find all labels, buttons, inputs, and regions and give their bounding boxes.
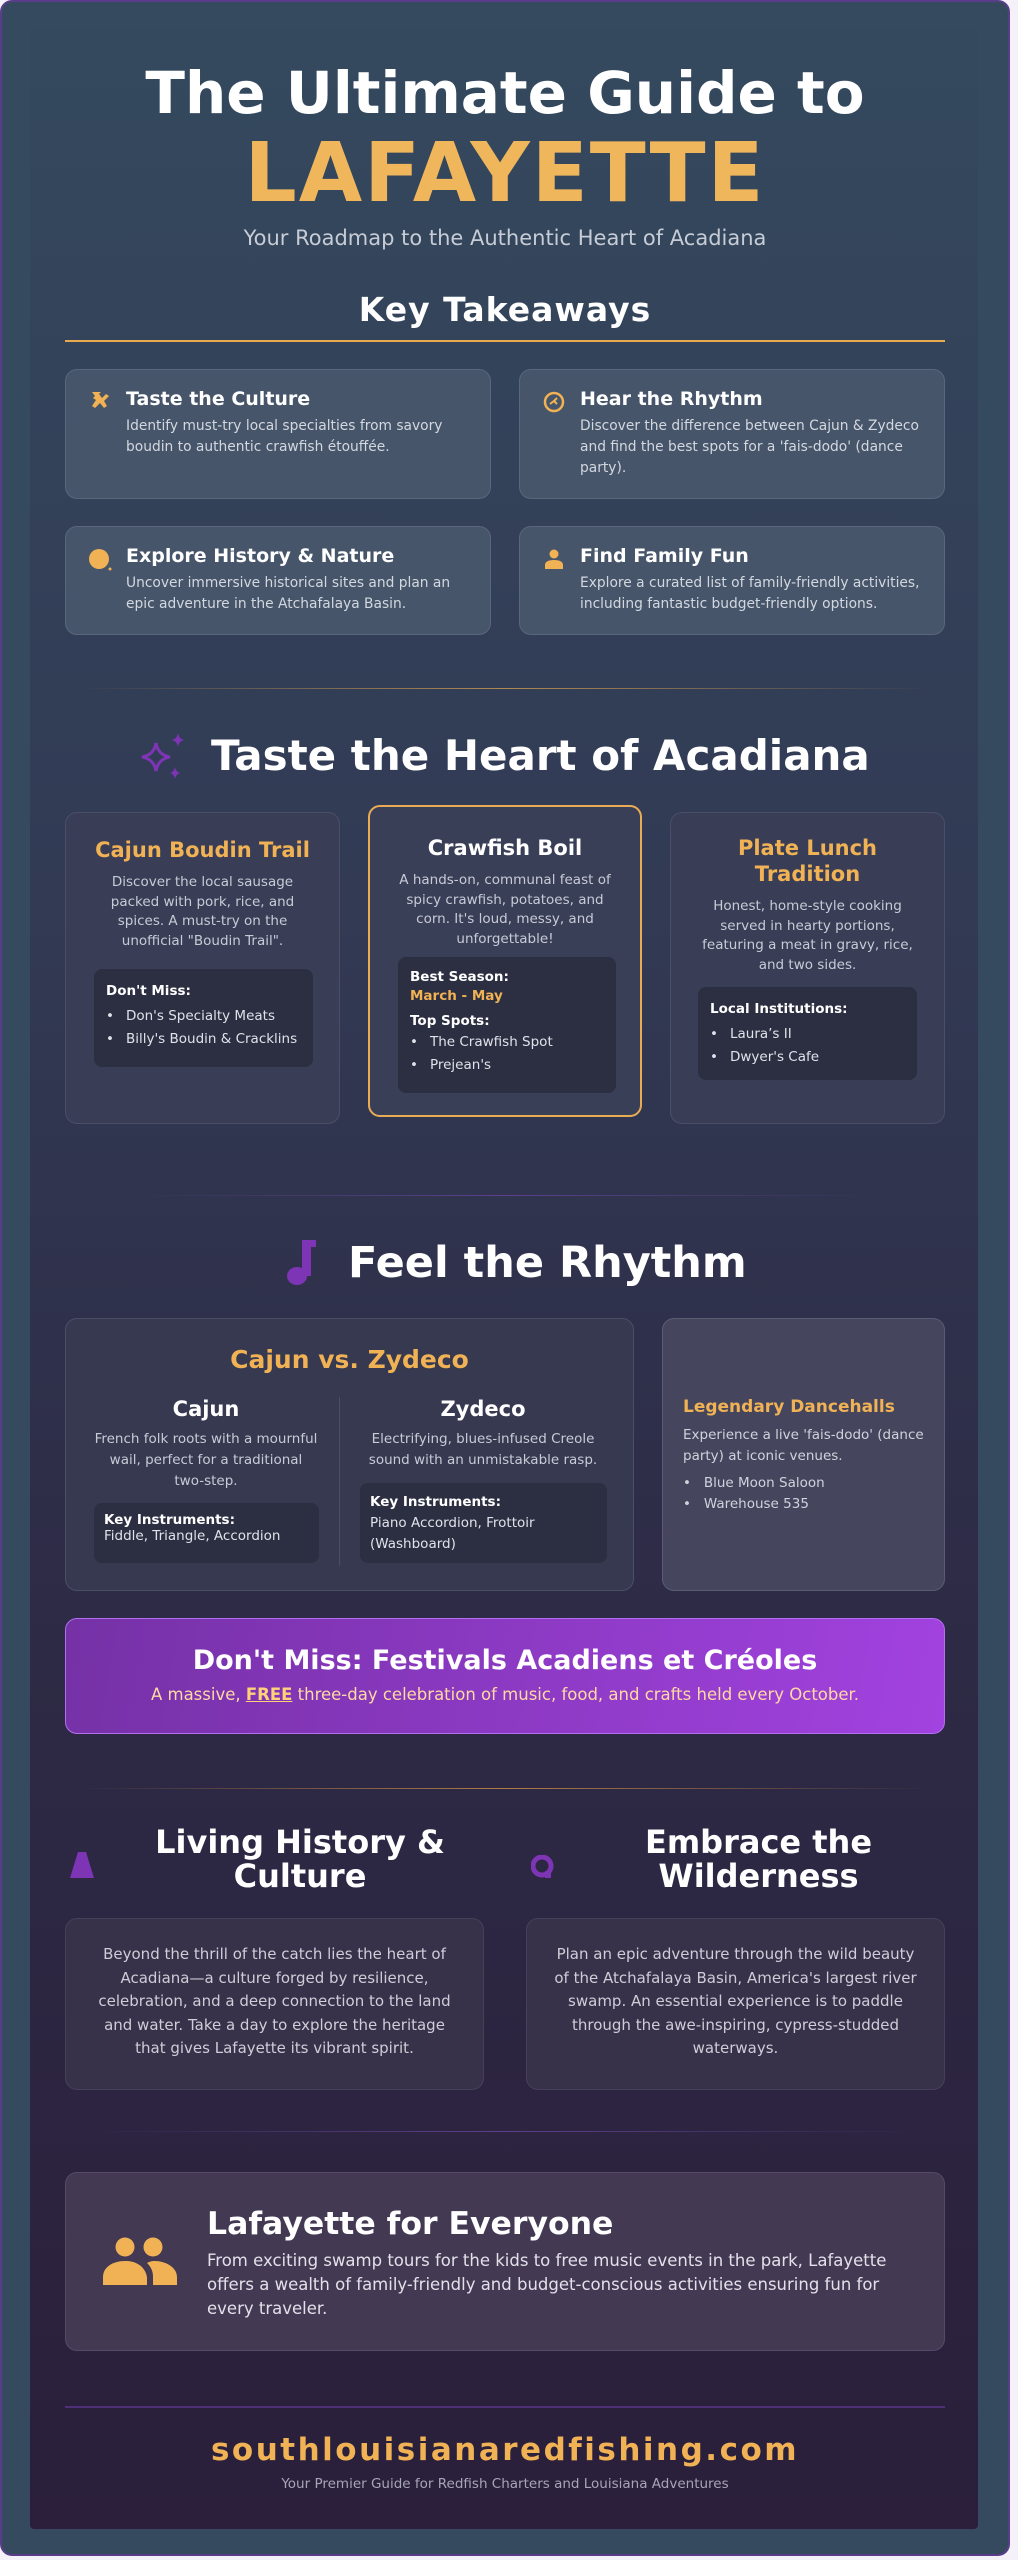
icon: person <box>545 550 563 569</box>
list: local institutions: Dwyer's Cafe <box>730 1049 819 1065</box>
list: don't miss <box>94 969 313 1067</box>
list: don't miss: Billy's Boudin & Cracklins <box>126 1031 297 1047</box>
list: don't miss: Don't Miss: <box>106 983 191 999</box>
list: season and spots: Prejean's <box>430 1057 491 1073</box>
heading: feel the rhythm: Feel the Rhythm <box>348 1238 747 1288</box>
banner: festivals <box>65 1618 945 1734</box>
icon: record <box>544 392 564 412</box>
column: zydeco: Electrifying, blues-infused Creole sound with an unmistakable rasp. <box>369 1431 597 1468</box>
title: The Ultimate Guide to <box>145 59 865 127</box>
card: legendary dancehalls: • Blue Moon Saloon <box>683 1475 825 1491</box>
card: family fun <box>519 526 945 635</box>
card: explore history <box>65 526 491 635</box>
footer url: southlouisianaredfishing.com <box>211 2432 799 2468</box>
card: boudin trail <box>65 812 340 1124</box>
card: history text <box>65 1918 484 2090</box>
heading: embrace wilderness <box>531 1823 872 1895</box>
card: explore history: Explore History & Nature <box>126 545 394 567</box>
card: hear the rhythm: Hear the Rhythm <box>580 388 763 410</box>
card: lafayette for everyone: From exciting swamp tours for the kids to free music events in the park, Lafayette offers a wealth of family-friendly and budget-conscious activities ensuring fun for every traveler. <box>207 2251 886 2318</box>
list: local institutions: Local Institutions: <box>710 1001 848 1017</box>
card: cajun vs zydeco: Key Instruments: <box>104 1512 235 1528</box>
icon: music note <box>287 1240 316 1285</box>
card: lafayette for everyone <box>65 2172 945 2351</box>
list: local institutions: Laura’s II <box>730 1026 792 1042</box>
card: legendary dancehalls: • Warehouse 535 <box>683 1496 809 1512</box>
column: cajun: Cajun <box>173 1397 239 1421</box>
list: season and spots: Best Season: <box>410 969 509 985</box>
card: hear the rhythm: Discover the difference between Cajun & Zydeco and find the best spots for a 'fais-dodo' (dance party). <box>580 418 919 476</box>
title: LAFAYETTE: LAFAYETTE <box>244 126 766 221</box>
footer tagline: Your Premier Guide for Redfish Charters and Louisiana Adventures <box>281 2476 729 2492</box>
heading: living history <box>70 1823 445 1895</box>
card: wilderness text: Plan an epic adventure through the wild beauty of the Atchafalaya Basin, America's largest river swamp. An essential experience is to paddle through the awe-inspiring, cypress-studded waterways. <box>554 1945 917 2057</box>
card: hear the rhythm <box>519 369 945 499</box>
card: boudin trail: Cajun Boudin Trail <box>95 838 310 862</box>
list: don't miss: Don's Specialty Meats <box>126 1008 275 1024</box>
card: lafayette for everyone: Lafayette for Everyone <box>207 2206 613 2242</box>
card: plate lunch: Plate Lunch <box>738 836 877 860</box>
card: cajun vs zydeco: Cajun vs. Zydeco <box>230 1345 469 1374</box>
column: cajun <box>94 1397 319 1563</box>
card: boudin trail: Discover the local sausage packed with pork, rice, and spices. A must-try on the unofficial "Boudin Trail". <box>111 874 294 949</box>
icon: triangle <box>70 1852 94 1878</box>
card: wilderness text <box>526 1918 945 2090</box>
subtitle: Your Roadmap to the Authentic Heart of Acadiana <box>244 226 766 250</box>
card: legendary dancehalls: Experience a live 'fais-dodo' (dance party) at iconic venues. <box>683 1427 924 1464</box>
card: cajun vs zydeco: Fiddle, Triangle, Accordion <box>104 1528 280 1544</box>
list: season and spots: March - May <box>410 988 503 1004</box>
icon: family <box>103 2238 177 2285</box>
heading: living history: Living History & <box>155 1823 445 1861</box>
card: cajun vs zydeco: Piano Accordion, Frottoir (Washboard) <box>370 1515 535 1552</box>
list: season and spots: Top Spots: <box>410 1013 490 1029</box>
icon: leaf <box>531 1855 554 1878</box>
card: cajun vs zydeco <box>65 1318 634 1591</box>
column: cajun: French folk roots with a mournful wail, perfect for a traditional two-step. <box>95 1431 317 1489</box>
card: legendary dancehalls: Legendary Dancehalls <box>683 1397 895 1417</box>
heading: key takeaways: Key Takeaways <box>359 290 651 329</box>
column: zydeco <box>360 1397 607 1563</box>
heading: living history: Culture <box>234 1857 366 1895</box>
icon: sparkles <box>142 733 184 779</box>
heading: embrace wilderness: Wilderness <box>658 1857 859 1895</box>
card: taste the culture: Taste the Culture <box>126 388 310 410</box>
card: crawfish boil: A hands-on, communal feast of spicy crawfish, potatoes, and corn. It's loud, messy, and unforgettable! <box>399 872 611 947</box>
card: plate lunch: Honest, home-style cooking served in hearty portions, featuring a meat in gravy, rice, and two sides. <box>702 898 913 973</box>
heading: taste the heart: Taste the Heart of Acadiana <box>211 731 870 780</box>
card: taste the culture: Identify must-try local specialties from savory boudin to authentic crawfish étouffée. <box>126 418 442 455</box>
list: local institutions <box>698 987 917 1080</box>
banner: festivals: A massive, FREE three-day celebration of music, food, and crafts held every October. <box>151 1685 859 1704</box>
icon: leaf <box>89 549 112 570</box>
card: history text: Beyond the thrill of the catch lies the heart of Acadiana—a culture forged by resilience, celebration, and a deep connection to the land and water. Take a day to explore the heritage that gives Lafayette its vibrant spirit. <box>98 1945 451 2057</box>
card: family fun: Explore a curated list of family-friendly activities, including fantastic budget-friendly options. <box>580 575 919 612</box>
list: season and spots: The Crawfish Spot <box>430 1034 553 1050</box>
card: cajun vs zydeco: Key Instruments: <box>370 1494 501 1510</box>
card: plate lunch <box>670 812 945 1124</box>
card: legendary dancehalls <box>662 1318 945 1591</box>
banner: festivals: Don't Miss: Festivals Acadiens et Créoles <box>193 1645 817 1676</box>
card: crawfish boil <box>368 805 642 1117</box>
list: season and spots <box>398 957 616 1093</box>
column: zydeco: Zydeco <box>440 1397 526 1421</box>
card: plate lunch: Tradition <box>755 862 860 886</box>
card: crawfish boil: Crawfish Boil <box>428 836 582 860</box>
card: explore history: Uncover immersive historical sites and plan an epic adventure in the Atchafalaya Basin. <box>126 575 450 612</box>
heading: embrace wilderness: Embrace the <box>645 1823 872 1861</box>
card: family fun: Find Family Fun <box>580 545 749 567</box>
card: taste the culture <box>65 369 491 499</box>
icon: crawfish <box>92 392 109 408</box>
